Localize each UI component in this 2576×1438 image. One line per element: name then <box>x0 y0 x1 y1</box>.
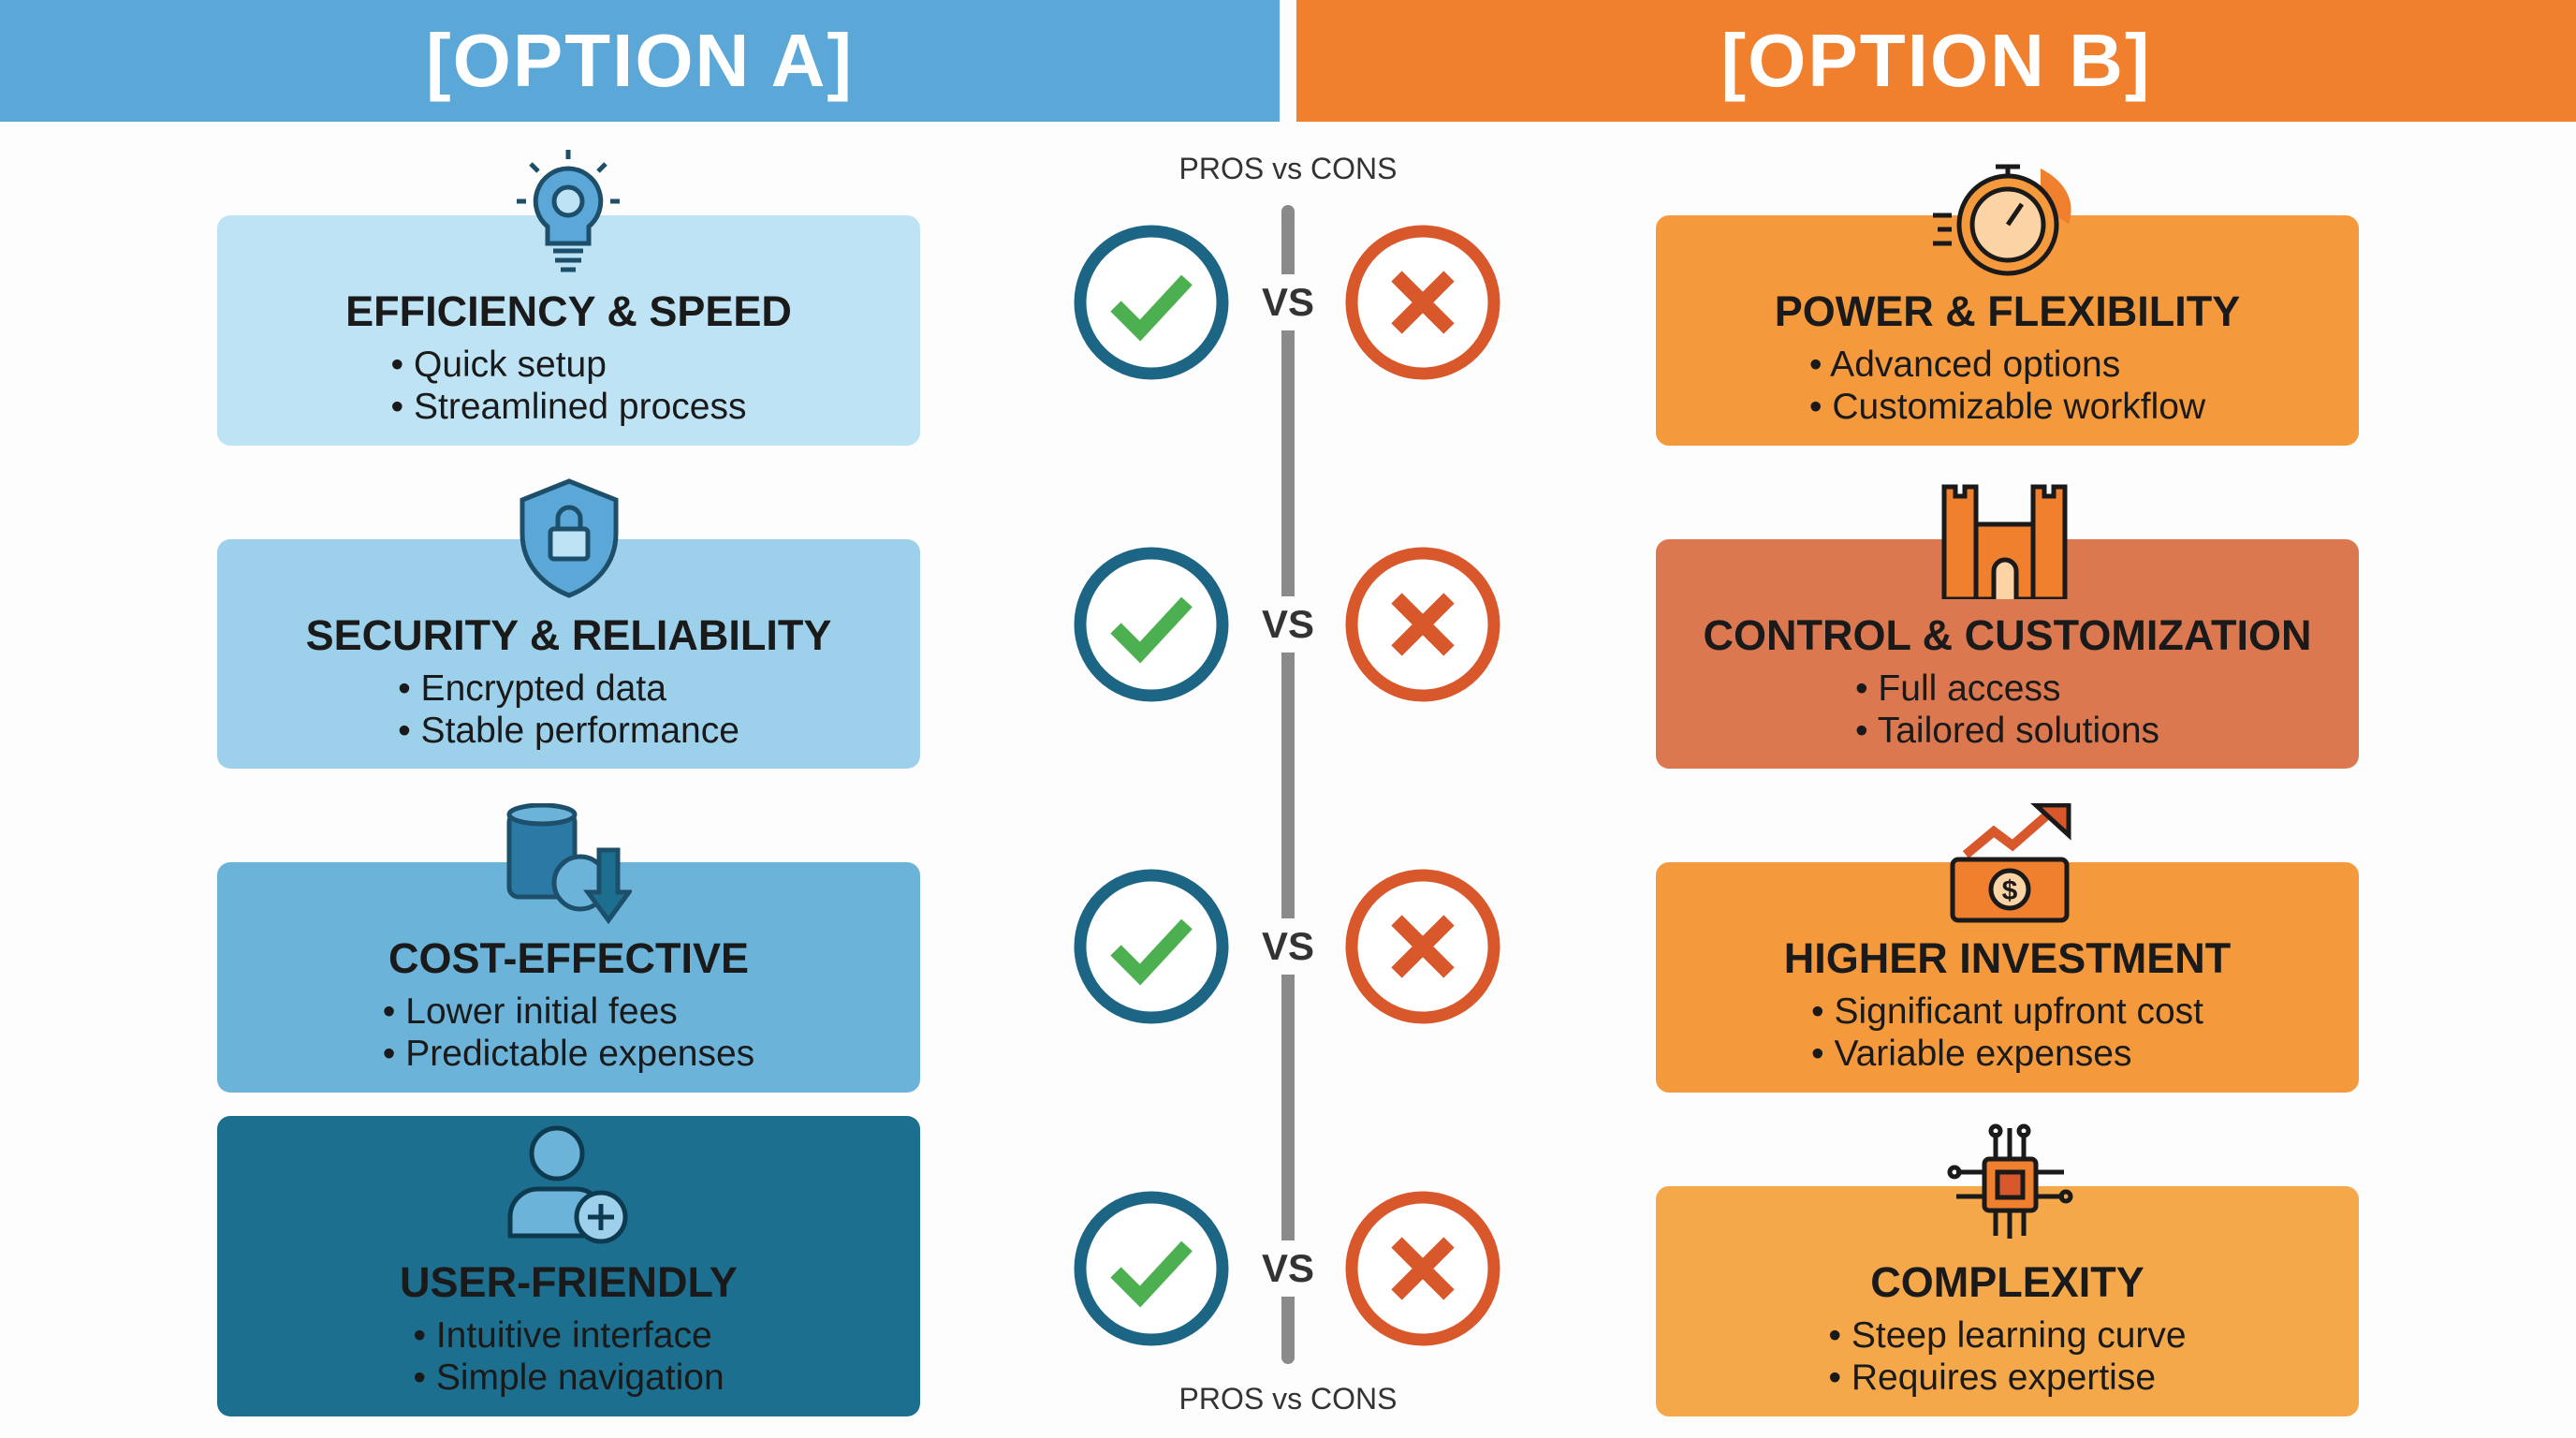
icon: chip <box>1947 1123 2072 1239</box>
icon: money growth: $ <box>2002 875 2018 906</box>
card A3: • Lower initial fees <box>383 991 678 1032</box>
icon: money growth <box>1951 803 2071 923</box>
card A1 <box>217 215 920 446</box>
row 3 comparison: VS <box>1262 924 1314 968</box>
row 1 comparison <box>1075 225 1500 380</box>
card A2: SECURITY & RELIABILITY <box>306 611 831 659</box>
card A4: USER-FRIENDLY <box>400 1258 738 1306</box>
card B4: • Steep learning curve <box>1828 1315 2187 1356</box>
card B4: • Requires expertise <box>1828 1357 2156 1398</box>
card B4: COMPLEXITY <box>1870 1258 2144 1306</box>
row 2 comparison: VS <box>1262 602 1314 646</box>
card A3: COST-EFFECTIVE <box>388 934 749 982</box>
card A4: • Intuitive interface <box>413 1315 712 1356</box>
card B2: CONTROL & CUSTOMIZATION <box>1704 611 2311 659</box>
row 4 comparison: VS <box>1262 1246 1314 1290</box>
card B2: • Full access <box>1855 668 2060 709</box>
row 4 comparison <box>1075 1191 1500 1346</box>
label: pros vs cons bottom: PROS vs CONS <box>1179 1382 1397 1416</box>
card B1: POWER & FLEXIBILITY <box>1775 287 2240 335</box>
card B3: • Significant upfront cost <box>1811 991 2203 1032</box>
center divider line <box>1281 205 1295 1364</box>
card A1: • Quick setup <box>391 345 607 385</box>
card A4 <box>217 1116 920 1416</box>
card A3: • Predictable expenses <box>383 1034 754 1074</box>
row 1 comparison: VS <box>1262 280 1314 324</box>
card B1: • Advanced options <box>1809 345 2120 385</box>
card A2 <box>217 539 920 769</box>
card A2: • Encrypted data <box>398 668 666 709</box>
header: option B <box>1296 0 2576 122</box>
header: option A <box>0 0 1280 122</box>
card B1: • Customizable workflow <box>1809 387 2205 427</box>
icon: user plus <box>507 1125 627 1243</box>
icon: castle <box>1941 485 2067 599</box>
icon: database coins <box>507 803 632 925</box>
header: option B: [OPTION B] <box>1721 19 2151 102</box>
card B3: HIGHER INVESTMENT <box>1784 934 2231 982</box>
card B2 <box>1656 539 2359 769</box>
icon: shield lock <box>520 478 618 598</box>
card B1 <box>1656 215 2359 446</box>
card A2: • Stable performance <box>398 711 739 751</box>
card B4 <box>1656 1186 2359 1416</box>
row 2 comparison <box>1075 547 1500 702</box>
card A1: EFFICIENCY & SPEED <box>345 287 792 335</box>
card A3 <box>217 862 920 1093</box>
icon: stopwatch flame <box>1933 165 2071 275</box>
icon: lightbulb gear <box>517 150 620 271</box>
header: option A: [OPTION A] <box>426 19 854 102</box>
card B3 <box>1656 862 2359 1093</box>
row 3 comparison <box>1075 869 1500 1024</box>
card B2: • Tailored solutions <box>1855 711 2159 751</box>
card A1: • Streamlined process <box>391 387 746 427</box>
card B3: • Variable expenses <box>1811 1034 2131 1074</box>
card A4: • Simple navigation <box>413 1357 724 1398</box>
label: pros vs cons top: PROS vs CONS <box>1179 152 1397 185</box>
